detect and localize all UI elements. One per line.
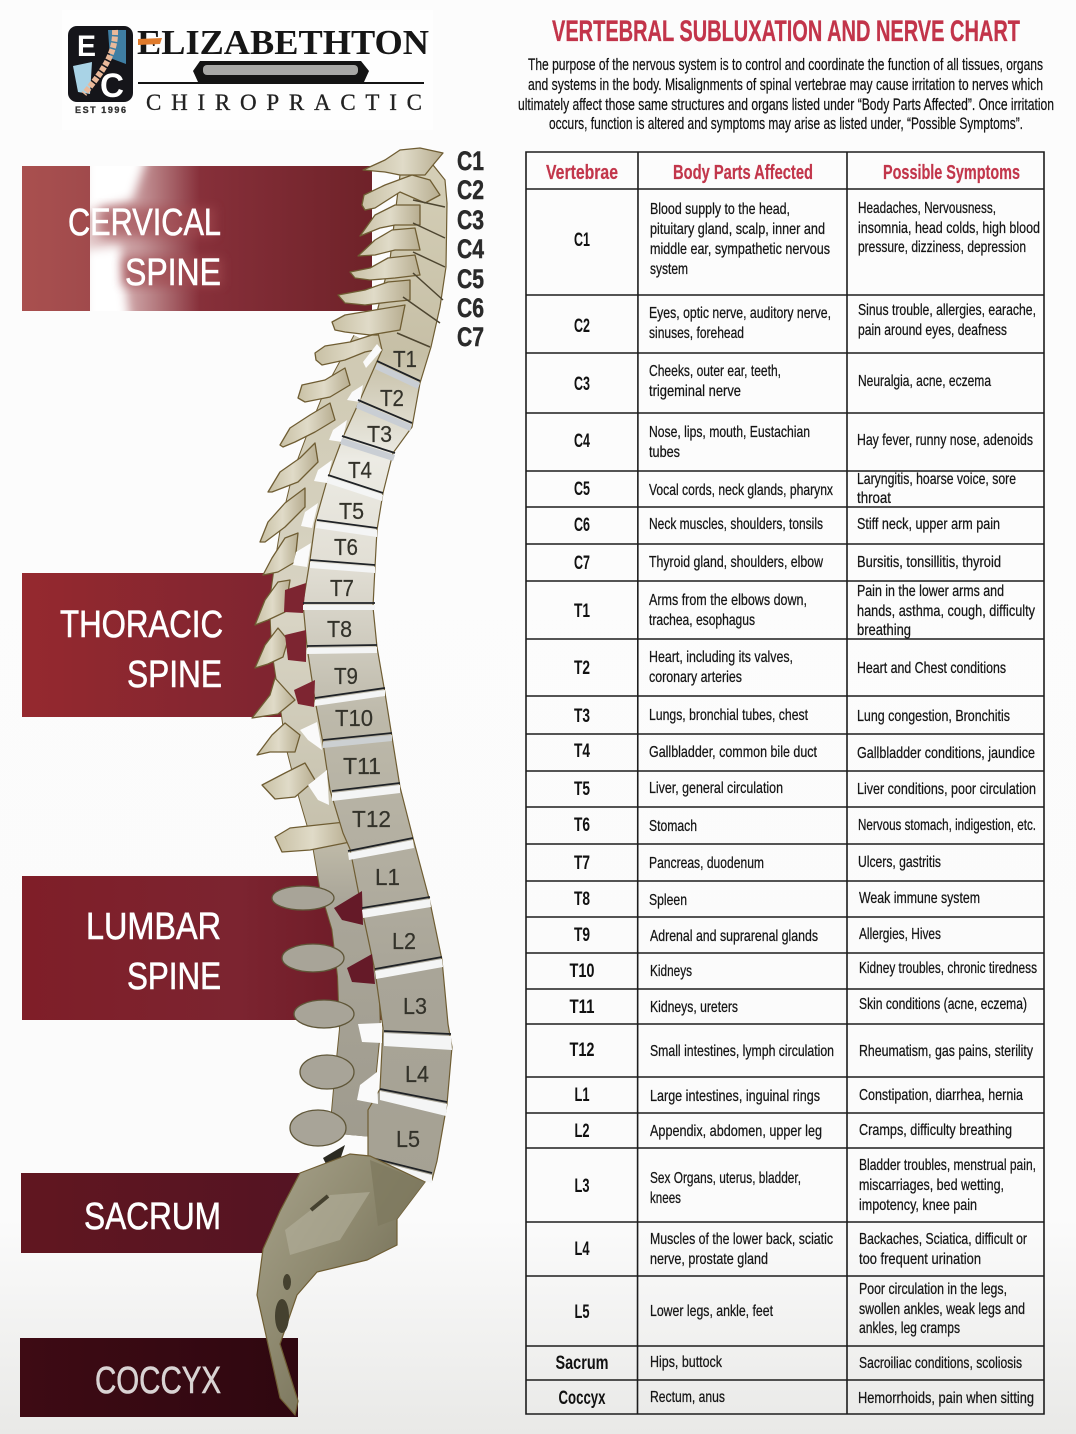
cervical vertebra labels: C6 (457, 293, 484, 323)
row T11: Skin conditions (acne, eczema) (859, 996, 1027, 1013)
row L1 (574, 1085, 1023, 1106)
vertebra labels on bones: T9 (334, 663, 358, 689)
row L4: nerve, prostate gland (650, 1251, 768, 1268)
row T7: Ulcers, gastritis (858, 854, 941, 871)
row T10 (570, 960, 1037, 982)
row T2: T2 (574, 658, 590, 679)
row C5: Laryngitis, hoarse voice, sore (857, 471, 1016, 488)
table header: Vertebrae (546, 162, 618, 184)
row C1: pituitary gland, scalp, inner and (650, 221, 825, 238)
row T7 (574, 853, 941, 874)
row L3 (574, 1157, 1036, 1214)
row T1: trachea, esophagus (649, 612, 755, 629)
cervical vertebra labels: C4 (457, 234, 484, 264)
row T9: Allergies, Hives (859, 926, 941, 943)
row T1: Arms from the elbows down, (649, 592, 807, 609)
vertebra labels on bones: T5 (339, 498, 364, 524)
row C7: C7 (574, 553, 590, 574)
row L2 (574, 1121, 1012, 1142)
vertebra labels on bones: T8 (327, 616, 352, 642)
subtitle: CHIROPRACTIC (146, 90, 422, 115)
row T3: Lung congestion, Bronchitis (857, 708, 1010, 725)
row Coccyx: Rectum, anus (650, 1389, 725, 1406)
row T12 (570, 1040, 1033, 1061)
articular pillar (290, 345, 372, 1135)
row T5: T5 (574, 779, 590, 800)
row C1 (574, 200, 1040, 278)
row C2: sinuses, forehead (649, 325, 744, 342)
vertebra labels on bones (327, 346, 429, 1152)
row C6 (574, 515, 1000, 536)
cervical vertebra labels (457, 146, 484, 352)
foramina (284, 344, 382, 1104)
row C1: pressure, dizziness, depression (858, 239, 1026, 256)
row C6: C6 (574, 515, 590, 536)
cervical vertebra labels: C7 (457, 322, 484, 352)
icon: EC spine badge: E (77, 30, 96, 63)
row C5: Vocal cords, neck glands, pharynx (649, 482, 833, 499)
row C2: pain around eyes, deafness (858, 322, 1007, 339)
band: lumbar spine: LUMBAR (86, 906, 221, 948)
intro paragraph (518, 55, 1054, 133)
row T3 (574, 706, 1010, 727)
row C6: Neck muscles, shoulders, tonsils (649, 516, 823, 533)
band: coccyx: COCCYX (95, 1360, 221, 1402)
illustration: spinal column (252, 148, 452, 1415)
discs (303, 200, 452, 1183)
vertebra labels on bones: T7 (330, 575, 354, 601)
row T12: T12 (570, 1040, 594, 1061)
row L1: L1 (574, 1085, 590, 1106)
row T2: Heart, including its valves, (649, 649, 793, 666)
row T8 (574, 889, 980, 910)
band: sacrum: SACRUM (84, 1196, 221, 1238)
table header: Body Parts Affected (673, 162, 813, 184)
row T4 (574, 741, 1035, 762)
row Coccyx: Hemorrhoids, pain when sitting (858, 1390, 1034, 1407)
row L5: swollen ankles, weak legs and (859, 1301, 1025, 1318)
row T11 (570, 996, 1027, 1018)
vertebra labels on bones: T6 (334, 534, 358, 560)
icon: orange state mark (138, 38, 162, 45)
cervical vertebra labels: C2 (457, 175, 484, 205)
row L4: Backaches, Sciatica, difficult or (859, 1231, 1028, 1248)
row T6: Stomach (649, 818, 697, 835)
band: lumbar spine (22, 876, 382, 1020)
cervical processes (332, 148, 443, 335)
row T7: Pancreas, duodenum (649, 855, 764, 872)
vertebra labels on bones: T11 (343, 753, 381, 779)
table header: Possible Symptoms (883, 162, 1020, 184)
row T9 (574, 925, 941, 946)
row C4: C4 (574, 431, 590, 452)
row C7: Bursitis, tonsillitis, thyroid (857, 554, 1001, 571)
vertebra labels on bones: T4 (348, 457, 372, 483)
row T2: coronary arteries (649, 669, 742, 686)
row L4: L4 (574, 1239, 590, 1260)
row Coccyx: Coccyx (558, 1388, 606, 1409)
row T5 (574, 779, 1036, 800)
row C2 (574, 302, 1036, 342)
row C4 (574, 424, 1033, 461)
row Sacrum: Hips, buttock (650, 1354, 723, 1371)
row T4: Gallbladder, common bile duct (649, 744, 817, 761)
band: lumbar spine: SPINE (127, 956, 221, 998)
row C2: C2 (574, 316, 590, 337)
row T1: breathing (857, 622, 911, 639)
row C1: middle ear, sympathetic nervous (650, 241, 830, 258)
row C3: trigeminal nerve (649, 383, 741, 400)
vertebral bodies (303, 165, 452, 1180)
row C1: system (650, 261, 688, 278)
vertebra labels on bones: T2 (380, 385, 404, 411)
row T5: Liver, general circulation (649, 780, 783, 797)
row T4: T4 (574, 741, 590, 762)
row T1: Pain in the lower arms and (857, 583, 1004, 600)
row C3: C3 (574, 374, 590, 395)
band: sacrum (21, 1173, 306, 1253)
sacrum and coccyx (257, 1154, 425, 1415)
row L3: Sex Organs, uterus, bladder, (650, 1170, 801, 1187)
row L2: Appendix, abdomen, upper leg (650, 1123, 822, 1140)
row C1: Headaches, Nervousness, (858, 200, 996, 217)
row T3: Lungs, bronchial tubes, chest (649, 707, 808, 724)
wordmark: ELIZABETHTON (137, 23, 429, 62)
row C5 (574, 471, 1016, 507)
row Sacrum: Sacroiliac conditions, scoliosis (859, 1355, 1022, 1372)
row L3: L3 (574, 1176, 590, 1197)
row L1: Large intestines, inguinal rings (650, 1088, 820, 1105)
table grid (526, 152, 1044, 1414)
established date: EST 1996 (75, 105, 126, 115)
row C7: Thyroid gland, shoulders, elbow (649, 554, 823, 571)
row T7: T7 (574, 853, 590, 874)
cervical vertebra labels: C5 (457, 264, 484, 294)
cervical vertebra labels: C1 (457, 146, 484, 176)
row T11: Kidneys, ureters (650, 999, 738, 1016)
row L2: L2 (574, 1121, 590, 1142)
row T11: T11 (570, 997, 595, 1018)
cervical vertebra labels: C3 (457, 205, 484, 235)
row L4: too frequent urination (859, 1251, 981, 1268)
row T12: Small intestines, lymph circulation (650, 1043, 834, 1060)
row C3: Cheeks, outer ear, teeth, (649, 363, 781, 380)
row C3 (574, 363, 991, 400)
table: vertebrae, body parts, symptoms (526, 152, 1044, 1414)
band: thoracic spine: THORACIC (60, 604, 223, 646)
row L5: ankles, leg cramps (859, 1320, 960, 1337)
row T6: T6 (574, 815, 590, 836)
row T8: Spleen (649, 892, 687, 909)
row L3: miscarriages, bed wetting, (859, 1177, 1004, 1194)
vertebra labels on bones: T1 (393, 346, 417, 372)
transverse processes (252, 335, 395, 1168)
row L5: Poor circulation in the legs, (859, 1281, 1007, 1298)
row L2: Cramps, difficulty breathing (859, 1122, 1012, 1139)
row T8: Weak immune system (859, 890, 980, 907)
row Sacrum (556, 1353, 1022, 1374)
vertebra labels on bones: L2 (392, 928, 416, 954)
row T9: T9 (574, 925, 590, 946)
row L3: impotency, knee pain (859, 1197, 977, 1214)
row T3: T3 (574, 706, 590, 727)
row C3: Neuralgia, acne, eczema (858, 373, 991, 390)
row L3: knees (650, 1190, 681, 1207)
ribbon divider (138, 61, 424, 84)
vertebra labels on bones: L4 (405, 1061, 429, 1087)
row L4 (574, 1231, 1028, 1268)
table header (546, 162, 1020, 184)
row T6 (574, 815, 1036, 836)
vertebra labels on bones: T10 (335, 705, 373, 731)
row C5: C5 (574, 479, 590, 500)
row C2: Eyes, optic nerve, auditory nerve, (649, 305, 831, 322)
vertebra labels on bones: L5 (396, 1126, 420, 1152)
row T8: T8 (574, 889, 590, 910)
icon: EC spine badge: C (100, 67, 124, 105)
row T10: Kidneys (650, 963, 692, 980)
row C1: C1 (574, 230, 590, 251)
band: cervical spine: CERVICAL (68, 202, 221, 244)
vertebra labels on bones: L3 (403, 993, 427, 1019)
vertebra labels on bones: T12 (352, 806, 391, 832)
row L4: Muscles of the lower back, sciatic (650, 1231, 833, 1248)
row Sacrum: Sacrum (556, 1353, 608, 1374)
row L5 (574, 1281, 1025, 1337)
row Coccyx (558, 1388, 1034, 1409)
icon: EC spine badge (68, 26, 133, 105)
band: thoracic spine: SPINE (127, 654, 222, 696)
vertebra labels on bones: L1 (375, 864, 400, 890)
band: cervical spine (22, 166, 372, 311)
row C6: Stiff neck, upper arm pain (857, 516, 1000, 533)
band: coccyx (20, 1338, 298, 1417)
row L5: Lower legs, ankle, feet (650, 1303, 773, 1320)
row L1: Constipation, diarrhea, hernia (859, 1087, 1023, 1104)
row T9: Adrenal and suprarenal glands (650, 928, 818, 945)
row T2 (574, 649, 1006, 686)
row L5: L5 (574, 1302, 590, 1323)
row C1: Blood supply to the head, (650, 201, 790, 218)
row C4: Nose, lips, mouth, Eustachian (649, 424, 810, 441)
row C5: throat (857, 490, 891, 507)
row C4: tubes (649, 444, 680, 461)
row T1: hands, asthma, cough, difficulty (857, 603, 1035, 620)
logo: Elizabethton Chiropractic (62, 10, 433, 130)
vertebra labels on bones: T3 (367, 421, 392, 447)
row T2: Heart and Chest conditions (857, 660, 1006, 677)
row C7 (574, 553, 1001, 574)
band: thoracic spine (22, 573, 320, 717)
band: cervical spine: SPINE (125, 252, 221, 294)
row T1: T1 (574, 601, 590, 622)
row T10: T10 (570, 961, 594, 982)
row T1 (574, 583, 1035, 639)
